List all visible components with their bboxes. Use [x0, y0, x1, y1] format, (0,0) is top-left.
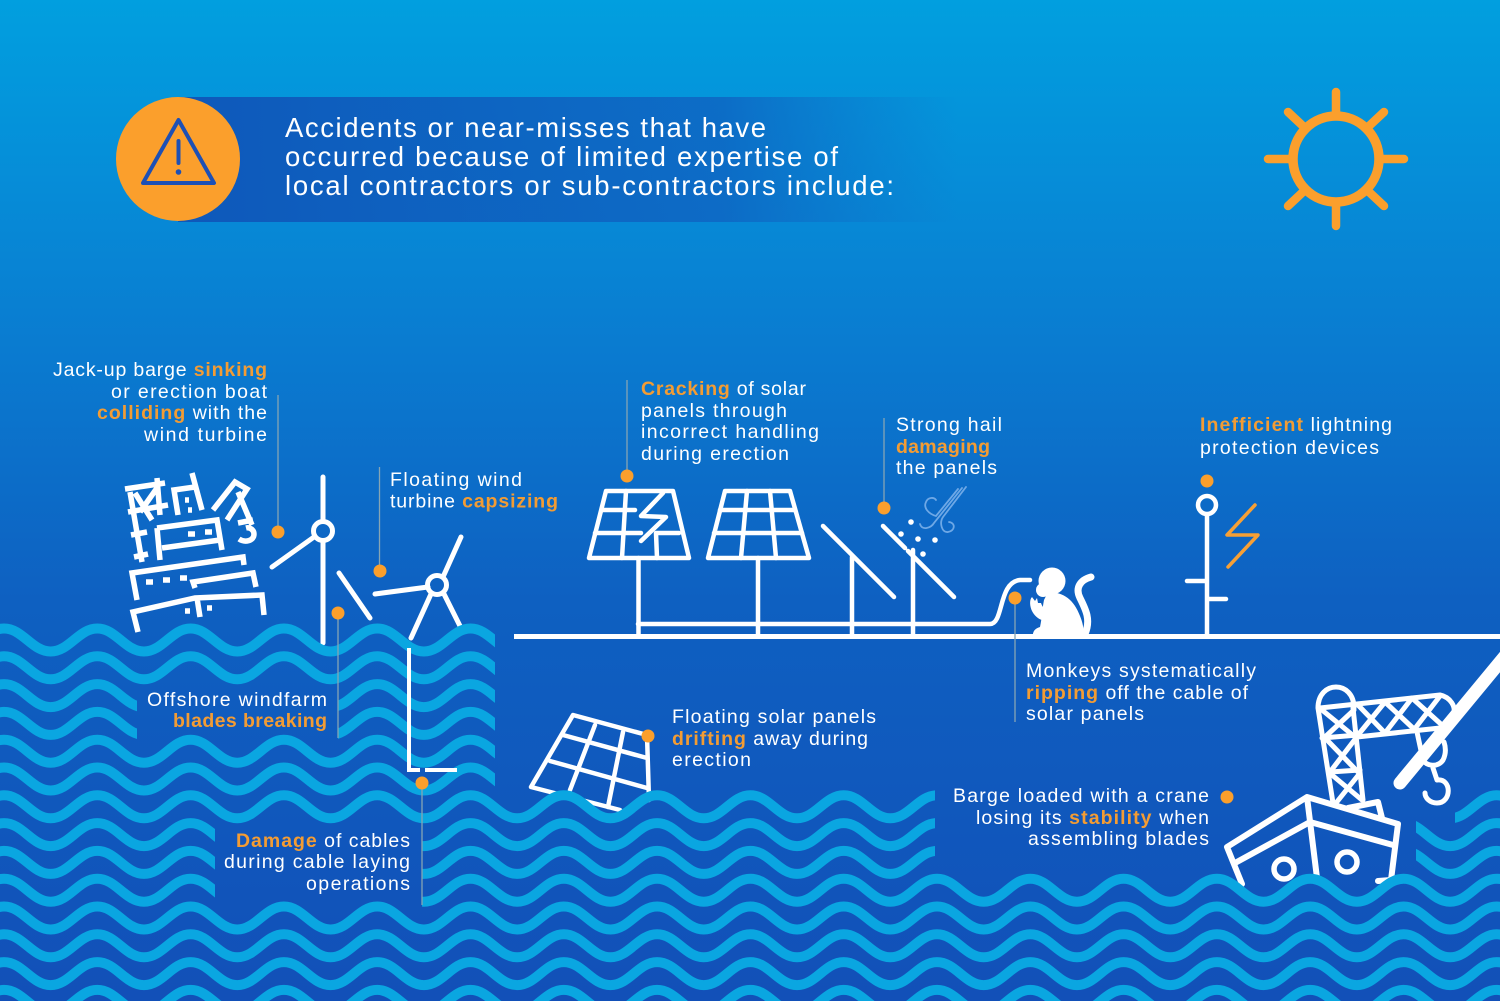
callout: cracking: Cracking of solar [641, 378, 806, 400]
icon: tilted solar panel with hail [883, 519, 954, 636]
ground line [514, 634, 1500, 639]
title text: Accidents or near-misses that have [285, 112, 766, 143]
callout: hail: Strong hail [896, 414, 1002, 436]
callout: cable damage [224, 776, 428, 905]
callout: hail [878, 414, 1002, 514]
title text: local contractors or sub-contractors include: [285, 170, 894, 201]
callout: floating wind turbine: turbine capsizing [390, 490, 558, 512]
callout: blades breaking: Offshore windfarm [147, 689, 327, 711]
icon: monkey [1030, 568, 1091, 637]
callout: hail: the panels [896, 457, 997, 479]
callout: monkeys: ripping off the cable of [1026, 682, 1249, 704]
callout: lightning: protection devices [1200, 437, 1379, 459]
title text: occurred because of limited expertise of [285, 141, 838, 172]
callout: cracking [620, 378, 819, 482]
icon: sinking jack-up barge [125, 473, 264, 632]
solar cable [638, 580, 1030, 624]
title text [285, 112, 894, 201]
callout: lightning: Inefficient lightning [1200, 414, 1392, 436]
callout: cable damage: during cable laying [224, 851, 410, 873]
icon: crane barge [1227, 650, 1500, 884]
icon: floating wind turbine [375, 537, 461, 638]
callout: hail: damaging [896, 436, 990, 458]
icon: offshore wind turbine with broken blade [272, 477, 370, 643]
callout: floating wind turbine: Floating wind [390, 469, 522, 491]
icon: lightning protection pole [1187, 496, 1226, 636]
callout: barge stability [953, 785, 1234, 850]
icon: warning circle [116, 97, 240, 221]
callout: jack-up barge: Jack-up barge sinking [53, 359, 267, 381]
title banner [116, 97, 958, 222]
icon: tilted solar panel [823, 526, 894, 636]
callout: barge stability: losing its stability when [976, 807, 1209, 829]
callout: monkeys [1008, 592, 1256, 725]
icon: solar panel [708, 491, 809, 636]
callout: barge stability: assembling blades [1028, 828, 1209, 850]
callout: cracking: panels through [641, 400, 787, 422]
callout: jack-up barge [53, 359, 284, 538]
callout: cracking: incorrect handling [641, 421, 819, 443]
icon: cracked solar panel [589, 491, 689, 636]
icon: lightning bolt [1227, 505, 1258, 567]
callout: blades breaking [147, 606, 344, 738]
callout: floating wind turbine [374, 467, 558, 578]
callout: lightning [1200, 414, 1392, 488]
callout: monkeys: solar panels [1026, 703, 1144, 725]
callout: cable damage: operations [306, 873, 410, 895]
callout: floating solar: Floating solar panels [672, 706, 876, 728]
callout: cable damage: Damage of cables [236, 830, 410, 852]
callout: jack-up barge: wind turbine [143, 424, 267, 446]
icon: wind [920, 487, 966, 532]
callout: barge stability: Barge loaded with a crane [953, 785, 1209, 807]
callout: monkeys: Monkeys systematically [1026, 660, 1256, 682]
callout: blades breaking: blades breaking [173, 710, 327, 732]
callout: floating solar: drifting away during [672, 728, 868, 750]
wave pattern [0, 628, 1500, 1001]
icon: sun [1268, 92, 1404, 226]
callout: floating solar [642, 706, 876, 771]
callout: floating solar: erection [672, 749, 751, 771]
callout: jack-up barge: or erection boat [111, 381, 268, 403]
icon: floating solar panel [531, 715, 649, 810]
floating turbine mooring [409, 648, 457, 770]
callout: cracking: during erection [641, 443, 789, 465]
callout: jack-up barge: colliding with the [97, 402, 267, 424]
